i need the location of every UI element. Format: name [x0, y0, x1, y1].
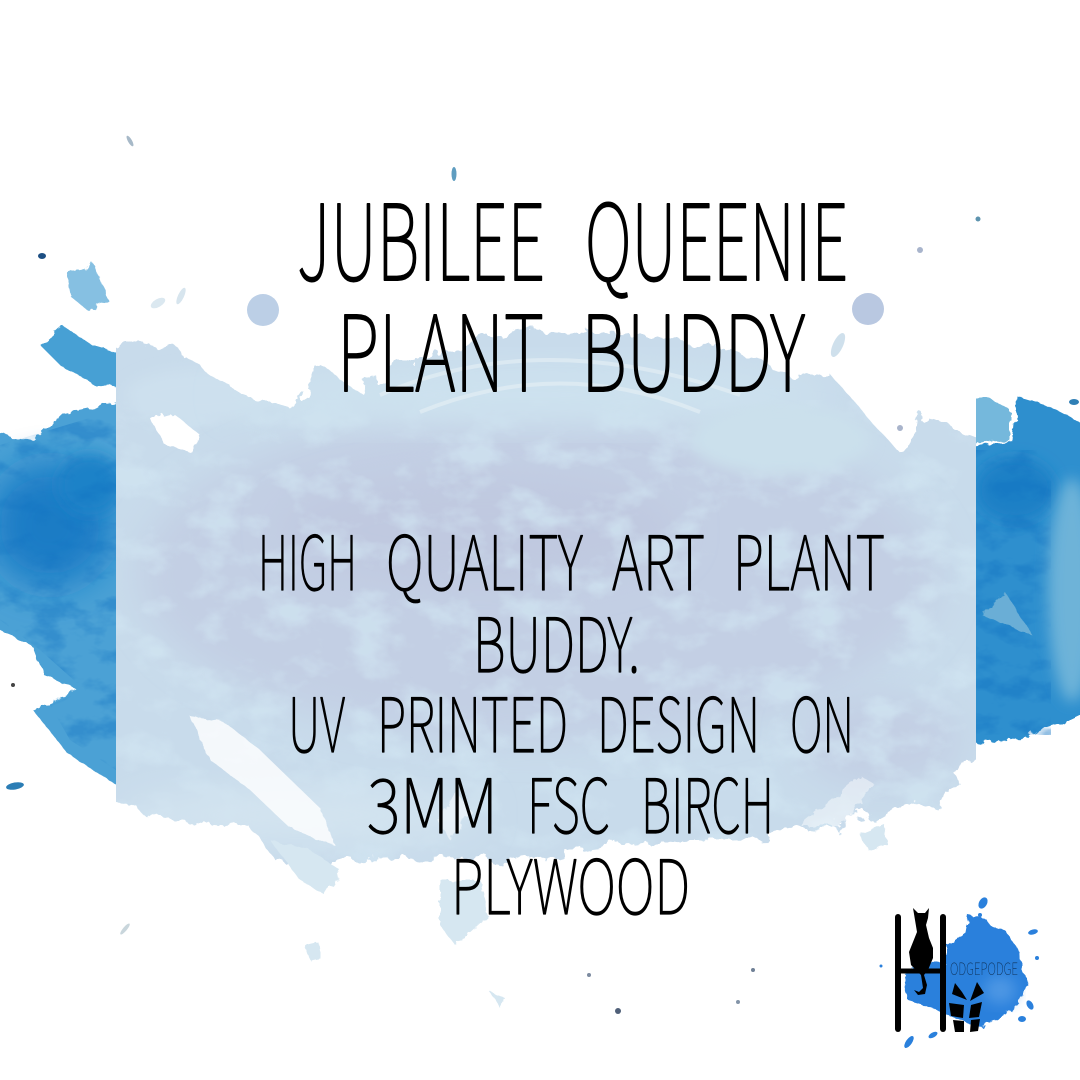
text block: description: PRINTED: [377, 665, 568, 774]
mottled dark texture right: [976, 450, 1051, 735]
text block: description: BIRCH: [641, 746, 774, 855]
panel: saturated right splash: [976, 396, 1080, 745]
text block: description: ART: [612, 503, 705, 612]
title: JUBILEE: [297, 159, 545, 311]
text block: description: PLANT: [733, 503, 885, 612]
title: QUEENIE: [585, 159, 848, 311]
logo: Hodgepodge: [880, 896, 1039, 1049]
icon: cat: [909, 908, 933, 995]
text block: description: HIGH: [258, 503, 357, 612]
pale ripple arcs: [380, 360, 740, 412]
icon: blue paint splat: [880, 896, 1039, 1049]
title: PLANT: [337, 270, 544, 422]
icon: letter H: [898, 917, 943, 1029]
title: BUDDY: [581, 270, 805, 422]
text block: description: QUALITY: [386, 503, 583, 612]
panel: pale watercolour splash: [80, 300, 1040, 1008]
text block: description: BUDDY.: [473, 585, 640, 694]
pale lower drips: [270, 825, 888, 1008]
text block: description: [258, 503, 885, 936]
text block: description: ON: [790, 665, 854, 774]
text block: description: FSC: [527, 746, 610, 855]
text block: description: UV: [288, 665, 345, 774]
panel: saturated left splash: [0, 262, 116, 784]
title: [297, 159, 848, 422]
icon: gift box: [949, 982, 984, 1032]
mottled dark texture left: [0, 410, 116, 770]
logo wordmark: ODGEPODGE: [950, 955, 1018, 980]
white gaps in the splash: [150, 412, 875, 845]
text block: description: 3MM: [367, 746, 498, 855]
text block: description: DESIGN: [597, 665, 760, 774]
text block: description: PLYWOOD: [451, 827, 690, 936]
mottled light texture: [136, 434, 946, 802]
